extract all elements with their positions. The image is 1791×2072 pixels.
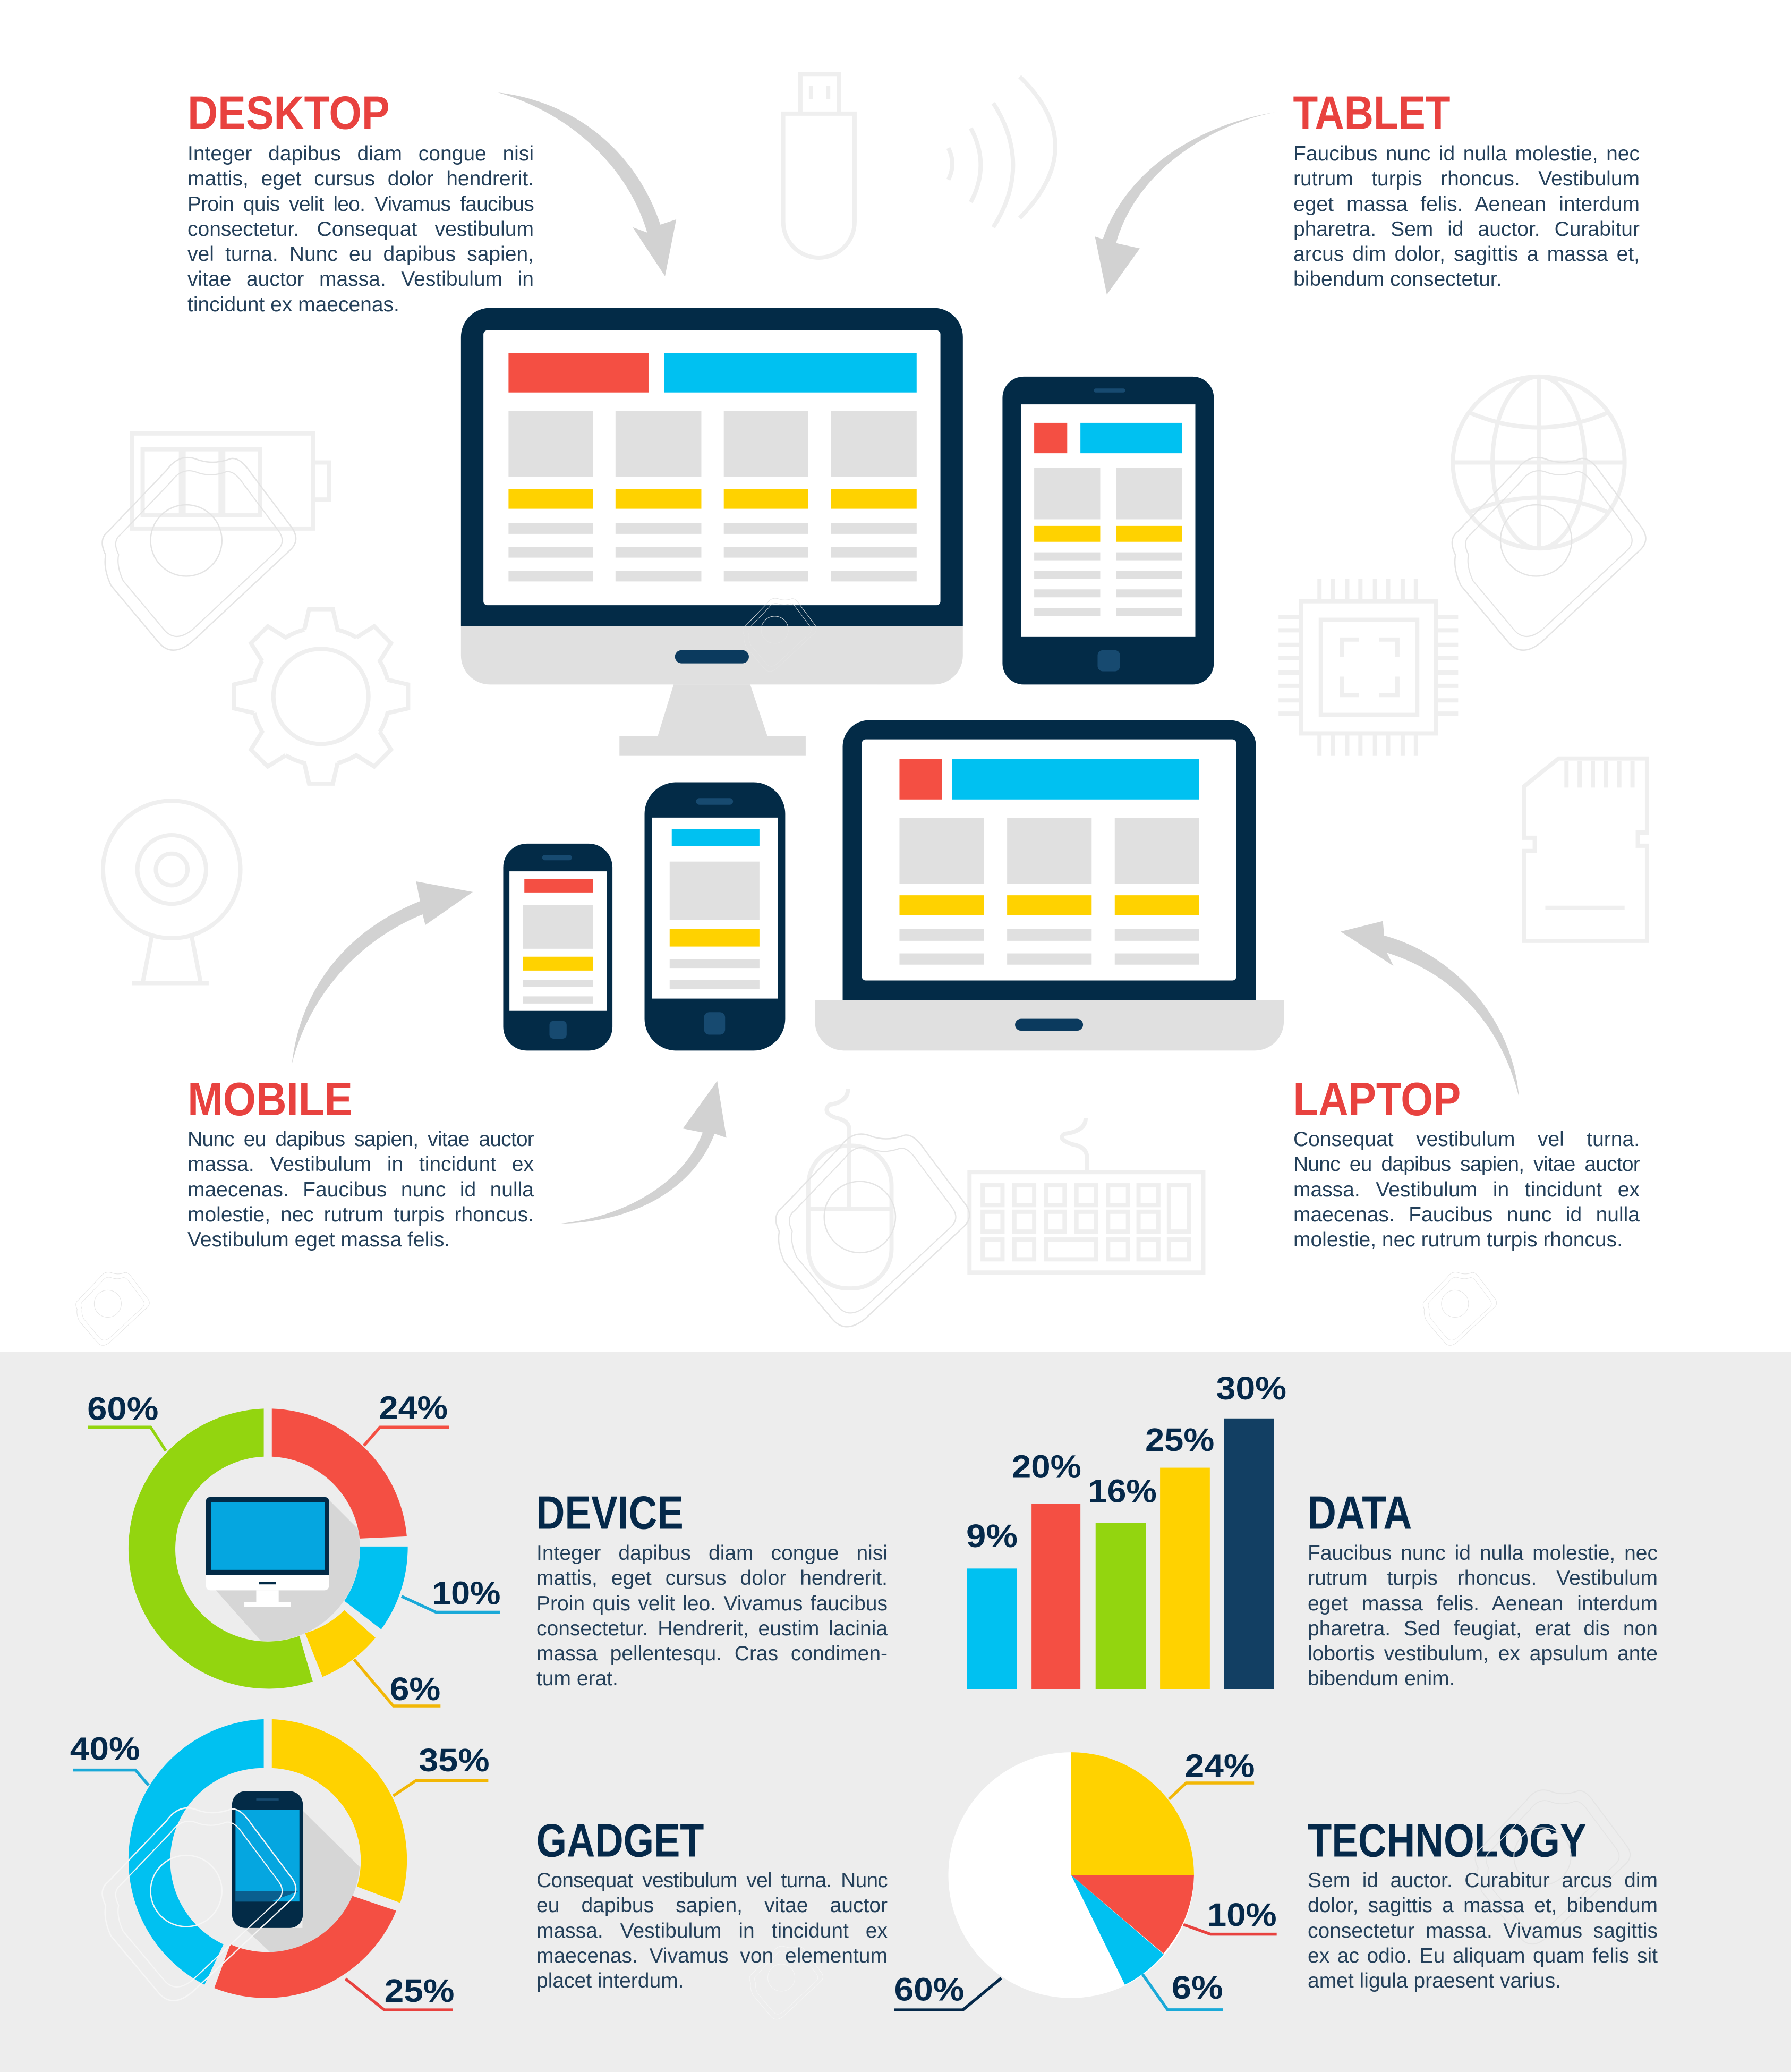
text: device: Integer dapibus diam congue nisi	[536, 1542, 888, 1565]
callouts: gadget donut labels	[70, 1731, 490, 2010]
text: technology	[1308, 1869, 1658, 1992]
text: desktop: Integer dapibus diam congue nisi	[187, 142, 534, 165]
slice: blue 6%	[1071, 1875, 1164, 1985]
text: gadget: placet interdum.	[536, 1969, 684, 1992]
text: tablet: arcus dim dolor, sagittis a massa et,	[1293, 243, 1640, 266]
segment: red 25%	[214, 1896, 396, 1998]
text: data	[1308, 1542, 1658, 1690]
text: desktop	[187, 142, 534, 316]
text: data: rutrum turpis rhoncus. Vestibulum	[1308, 1567, 1658, 1590]
text: technology: consectetur massa. Vivamus sagittis	[1308, 1919, 1658, 1942]
text: tablet: bibendum consectetur.	[1293, 268, 1502, 291]
device: large phone	[645, 782, 785, 1050]
bar chart: data: 30%	[1216, 1370, 1286, 1406]
arrow: laptop	[1341, 921, 1519, 1097]
segment: blue 40%	[129, 1719, 264, 1985]
segment: blue 10%	[344, 1547, 408, 1629]
text: laptop: Nunc eu dapibus sapien, vitae auctor	[1293, 1153, 1640, 1176]
text: device: massa pellentesqu. Cras condimen-	[536, 1642, 888, 1665]
text: technology: dolor, sagittis a massa et, bibendum	[1308, 1894, 1658, 1917]
slice: red 10%	[1071, 1875, 1194, 1954]
device: small phone	[503, 844, 612, 1050]
text: desktop: Proin quis velit leo. Vivamus faucibus	[187, 192, 534, 216]
arrow: mobile	[292, 881, 473, 1064]
text: data: eget massa felis. Aenean interdum	[1308, 1592, 1658, 1615]
text: tablet: Faucibus nunc id nulla molestie, nec	[1293, 142, 1640, 165]
text: tablet: pharetra. Sem id auctor. Curabitur	[1293, 218, 1640, 241]
text: mobile: molestie, nec rutrum turpis rhoncus.	[187, 1203, 534, 1226]
text: data: pharetra. Sed feugiat, erat dis non	[1308, 1617, 1658, 1640]
icon: globe	[1453, 377, 1625, 548]
callouts: pie labels: 24%	[1185, 1748, 1255, 1784]
heading: technology: TECHNOLOGY	[1308, 1814, 1587, 1867]
segment: green 60%	[129, 1408, 313, 1689]
bar chart: data: 25%	[1145, 1422, 1214, 1458]
text: gadget: eu dapibus sapien, vitae auctor	[536, 1894, 888, 1917]
text: laptop: molestie, nec rutrum turpis rhoncus.	[1293, 1228, 1623, 1251]
text: tablet: rutrum turpis rhoncus. Vestibulum	[1293, 167, 1640, 190]
text: data: bibendum enim.	[1308, 1667, 1455, 1690]
text: technology: Sem id auctor. Curabitur arcus dim	[1308, 1869, 1658, 1892]
slice: yellow 24%	[1071, 1752, 1194, 1875]
segment: yellow 6%	[305, 1610, 376, 1677]
text: desktop: vitae auctor massa. Vestibulum in	[187, 268, 534, 291]
text: technology: amet ligula praesent varius.	[1308, 1969, 1561, 1992]
text: desktop: vel turna. Nunc eu dapibus sapien,	[187, 243, 534, 266]
icon: wireless signal	[948, 77, 1055, 227]
heading: gadget: GADGET	[536, 1814, 704, 1867]
callouts: gadget donut labels: 25%	[385, 1973, 454, 2009]
text: technology: ex ac odio. Eu aliquam quam felis sit	[1308, 1944, 1658, 1967]
icon: keyboard	[969, 1118, 1203, 1272]
text: device: consectetur. Hendrerit, eustim lacinia	[536, 1617, 888, 1640]
text: gadget: Consequat vestibulum vel turna. Nunc	[536, 1869, 888, 1892]
text: tablet: eget massa felis. Aenean interdum	[1293, 192, 1640, 216]
heading: mobile: MOBILE	[187, 1073, 353, 1125]
text: device: tum erat.	[536, 1667, 618, 1690]
text: laptop: Consequat vestibulum vel turna.	[1293, 1128, 1640, 1151]
text: gadget: maecenas. Vivamus von elementum	[536, 1944, 888, 1967]
callouts: device donut labels: 60%	[87, 1390, 158, 1426]
segment: yellow 35%	[272, 1719, 407, 1903]
callouts: device donut labels: 6%	[390, 1671, 440, 1707]
long shadow: phone	[244, 1811, 360, 1952]
icon: computer mouse	[808, 1089, 892, 1288]
text: desktop: mattis, eget cursus dolor hendrerit.	[187, 167, 534, 190]
icon: gear	[234, 609, 408, 784]
text: mobile: Nunc eu dapibus sapien, vitae auctor	[187, 1128, 534, 1151]
text: device: Proin quis velit leo. Vivamus faucibus	[536, 1592, 888, 1615]
callouts: pie labels: 60%	[894, 1972, 964, 2008]
icon: processor chip	[1278, 579, 1458, 756]
heading: tablet: TABLET	[1293, 86, 1450, 139]
text: tablet	[1293, 142, 1640, 291]
donut chart: device	[129, 1408, 410, 1705]
callouts: gadget donut labels: 35%	[419, 1742, 490, 1778]
text: data: Faucibus nunc id nulla molestie, nec	[1308, 1542, 1658, 1565]
icon: monitor	[206, 1497, 329, 1607]
text: device	[536, 1542, 888, 1690]
text: laptop	[1293, 1128, 1640, 1251]
device: desktop monitor	[461, 308, 963, 756]
icon: memory card	[1524, 759, 1647, 941]
icon: battery	[132, 434, 329, 529]
bar chart: data	[966, 1370, 1286, 1689]
callouts: gadget donut labels: 40%	[70, 1731, 140, 1767]
icon: webcam	[103, 801, 241, 983]
heading: device: DEVICE	[536, 1487, 684, 1539]
text: laptop: massa. Vestibulum in tincidunt ex	[1293, 1178, 1640, 1201]
bar chart: data: 16%	[1088, 1473, 1157, 1509]
pie chart: technology	[948, 1752, 1194, 1998]
callouts: pie labels: 6%	[1172, 1969, 1223, 2006]
arrow: phone	[560, 1081, 727, 1224]
heading: data: DATA	[1308, 1487, 1412, 1539]
bar chart: data: 20%	[1012, 1449, 1081, 1485]
text: mobile	[187, 1128, 534, 1251]
callouts: pie labels	[894, 1748, 1277, 2010]
donut chart: gadget	[129, 1719, 410, 2009]
text: data: lobortis vestibulum, ex apsulum ante	[1308, 1642, 1658, 1665]
faint stamp shapes	[76, 457, 1645, 2019]
text: mobile: massa. Vestibulum in tincidunt ex	[187, 1153, 534, 1176]
text: desktop: consectetur. Consequat vestibulum	[187, 218, 534, 241]
icon: phone	[232, 1791, 303, 1928]
text: mobile: maecenas. Faucibus nunc id nulla	[187, 1178, 534, 1201]
segment: red 24%	[272, 1408, 407, 1539]
device: laptop	[815, 720, 1284, 1050]
device: tablet	[1002, 377, 1214, 684]
text: gadget	[536, 1869, 888, 1992]
icon: usb stick	[783, 74, 855, 258]
callouts: device donut labels: 10%	[432, 1575, 500, 1611]
long shadow: monitor	[216, 1500, 360, 1641]
heading: desktop: DESKTOP	[187, 86, 390, 139]
bottom panel background	[0, 1352, 1791, 2072]
callouts: device donut labels: 24%	[379, 1390, 448, 1426]
text: device: mattis, eget cursus dolor hendrerit.	[536, 1567, 888, 1590]
callouts: pie labels: 10%	[1207, 1897, 1277, 1933]
arrow: tablet	[1095, 112, 1275, 295]
arrow: desktop	[498, 92, 676, 276]
text: gadget: massa. Vestibulum in tincidunt ex	[536, 1919, 888, 1942]
bar chart: data: 9%	[966, 1518, 1018, 1554]
text: laptop: maecenas. Faucibus nunc id nulla	[1293, 1203, 1640, 1226]
callouts: device donut labels	[87, 1390, 500, 1707]
heading: laptop: LAPTOP	[1293, 1073, 1461, 1125]
text: mobile: Vestibulum eget massa felis.	[187, 1228, 450, 1251]
text: desktop: tincidunt ex maecenas.	[187, 293, 399, 316]
